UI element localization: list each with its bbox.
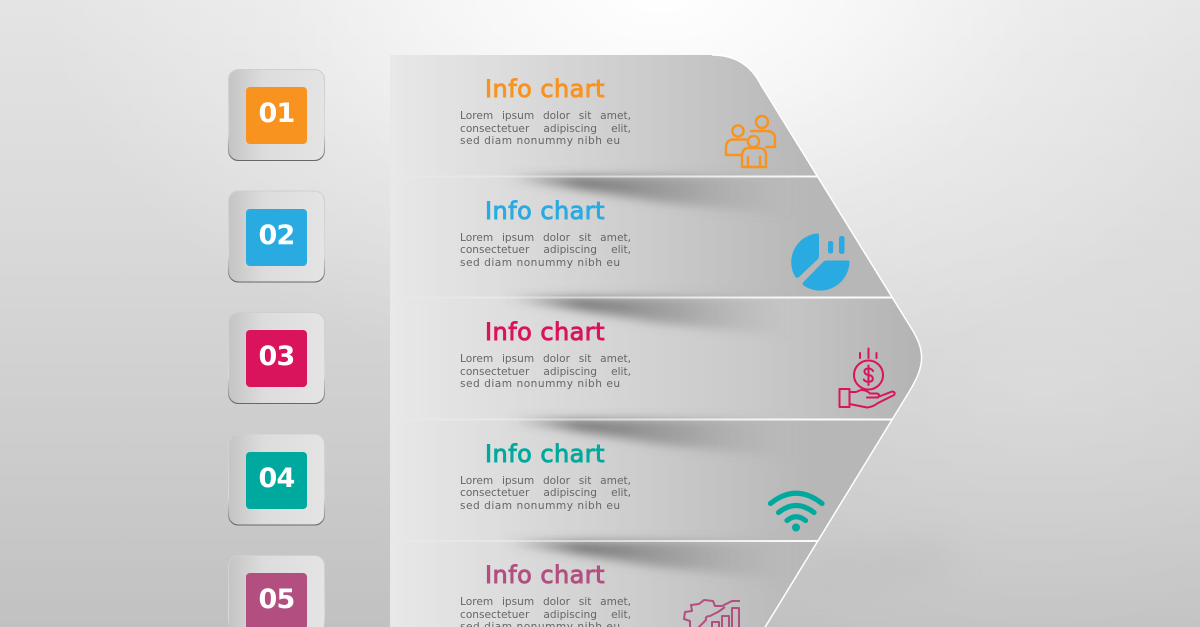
- number badge 03: 03: [258, 341, 294, 372]
- text block 01: Lorem ipsum dolor sit amet,: [460, 110, 631, 122]
- panel: number tile 01: [228, 70, 324, 160]
- heading 02: Info chart: [485, 196, 605, 224]
- arrow panel: [390, 55, 930, 627]
- text block 05: consectetuer adipiscing elit,: [460, 609, 631, 621]
- number badge 05: [246, 573, 307, 627]
- number badge 03: [246, 330, 307, 387]
- panel: number tile 05: [228, 556, 324, 627]
- text block 04: [460, 474, 631, 512]
- outer soft shadow: [800, 540, 950, 585]
- number badge 05: 05: [258, 584, 294, 615]
- icon: wifi: [770, 493, 822, 532]
- text block 03: sed diam nonummy nibh eu: [460, 378, 621, 390]
- text block 05: [460, 596, 631, 627]
- text block 01: sed diam nonummy nibh eu: [460, 135, 621, 147]
- icon: hand with coin: [840, 348, 895, 408]
- text block 04: sed diam nonummy nibh eu: [460, 500, 621, 512]
- text block 05: Lorem ipsum dolor sit amet,: [460, 596, 631, 608]
- number badge 04: [246, 452, 307, 508]
- number badge 02: [246, 208, 307, 266]
- heading 05: Info chart: [485, 561, 605, 589]
- number badge 01: [246, 87, 307, 144]
- number badge 01: 01: [258, 98, 294, 129]
- number badge 02: 02: [258, 220, 294, 250]
- text block 04: Lorem ipsum dolor sit amet,: [460, 474, 631, 486]
- icon: people: [726, 116, 775, 167]
- icon: gear and growth chart: [684, 600, 740, 627]
- text block 03: Lorem ipsum dolor sit amet,: [460, 353, 631, 365]
- heading 01: Info chart: [485, 75, 605, 103]
- panel: number tile 02: [228, 191, 324, 282]
- text block 01: [460, 110, 631, 147]
- heading 03: Info chart: [485, 318, 605, 346]
- panel: number tile 04: [228, 434, 324, 525]
- text block 02: Lorem ipsum dolor sit amet,: [460, 232, 631, 244]
- text block 02: [460, 232, 631, 269]
- heading 04: Info chart: [485, 440, 605, 468]
- icon: pie chart: [791, 233, 850, 291]
- number badge 04: 04: [258, 462, 294, 494]
- text block 03: consectetuer adipiscing elit,: [460, 366, 631, 378]
- arrow outline: [712, 55, 922, 627]
- panel: arrow body: [390, 55, 930, 627]
- text block 04: consectetuer adipiscing elit,: [460, 487, 631, 499]
- text block 01: consectetuer adipiscing elit,: [460, 123, 631, 135]
- text block 02: consectetuer adipiscing elit,: [460, 244, 631, 256]
- text block 02: sed diam nonummy nibh eu: [460, 257, 621, 269]
- text block 03: [460, 353, 631, 390]
- panel: number tile 03: [228, 312, 324, 404]
